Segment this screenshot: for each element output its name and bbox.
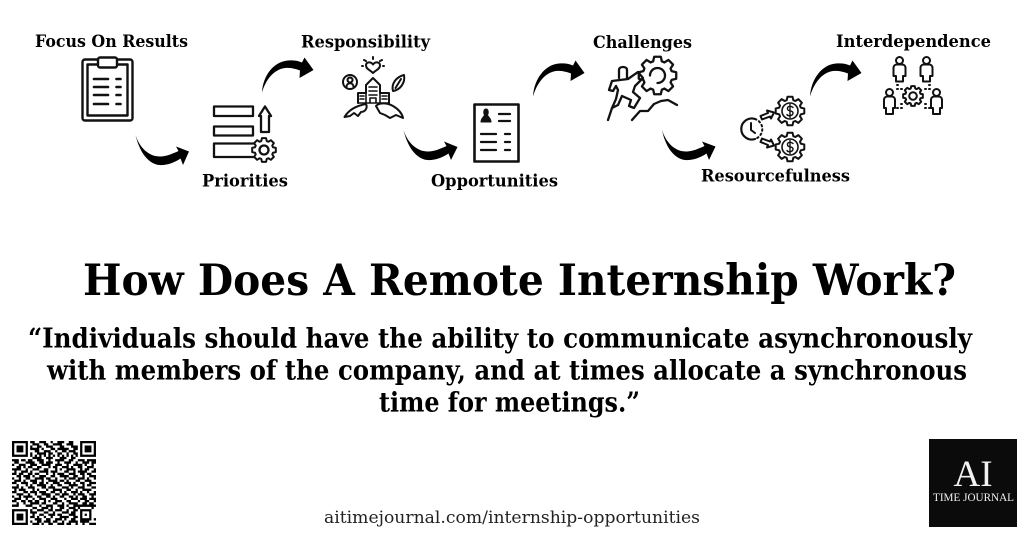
logo: AI Time Journal: TIME JOURNAL [933,492,1014,504]
arrow: priorities to responsibility [262,58,314,92]
label: Focus On Results: Focus On Results [35,32,188,52]
website url: aitimejournal.com/internship-opportunities [324,508,700,528]
icon: opportunities document [474,104,518,162]
icon: clipboard [82,58,132,120]
label: Responsibility: Responsibility [301,32,431,52]
icon: resourcefulness clock and gears [741,97,804,161]
arrow: responsibility to opportunities [404,130,458,160]
title: How Does A Remote Internship Work? [83,256,956,306]
label: Resourcefulness: Resourcefulness [701,166,850,186]
logo: AI Time Journal: AI [953,454,993,495]
quote [28,324,973,418]
quote: time for meetings.” [379,388,640,418]
QR code [12,442,96,524]
arrow: opportunities to challenges [533,60,584,96]
label: Challenges: Challenges [593,33,692,53]
icon: priorities bars with gear [214,106,276,162]
label: Opportunities: Opportunities [431,172,558,192]
icon: interdependence people and gear [884,57,942,114]
arrow: clipboard to priorities [136,135,189,165]
arrow: challenges to resourcefulness [662,130,716,160]
icon: responsibility building [343,57,404,118]
arrow: resourcefulness to interdependence [810,60,862,96]
label: Priorities: Priorities [202,172,288,192]
icon: challenges climber and gear [608,57,677,120]
label: Interdependence: Interdependence [836,32,991,52]
logo: AI Time Journal [929,439,1017,527]
